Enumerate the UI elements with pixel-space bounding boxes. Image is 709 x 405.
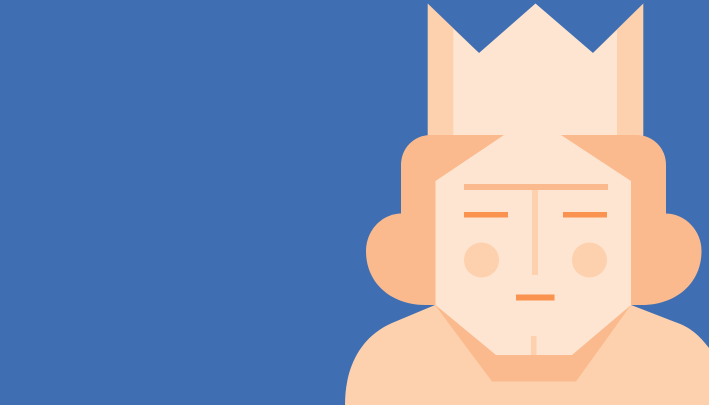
eyebrow line [464, 184, 608, 190]
left hair bun [366, 213, 440, 305]
left cheek [464, 242, 499, 278]
crown back side bands [428, 4, 643, 140]
body [345, 305, 709, 405]
hair top block [401, 135, 666, 260]
face [436, 135, 631, 355]
hair [366, 135, 702, 305]
right cheek [572, 242, 607, 278]
crown [428, 4, 643, 140]
chin mark [531, 336, 536, 355]
right eye [563, 212, 607, 218]
right hair bun [626, 213, 702, 305]
left eye [464, 212, 508, 218]
neck shadow [435, 305, 631, 382]
mouth [516, 294, 554, 300]
crown front [453, 4, 617, 140]
nose [532, 190, 538, 275]
